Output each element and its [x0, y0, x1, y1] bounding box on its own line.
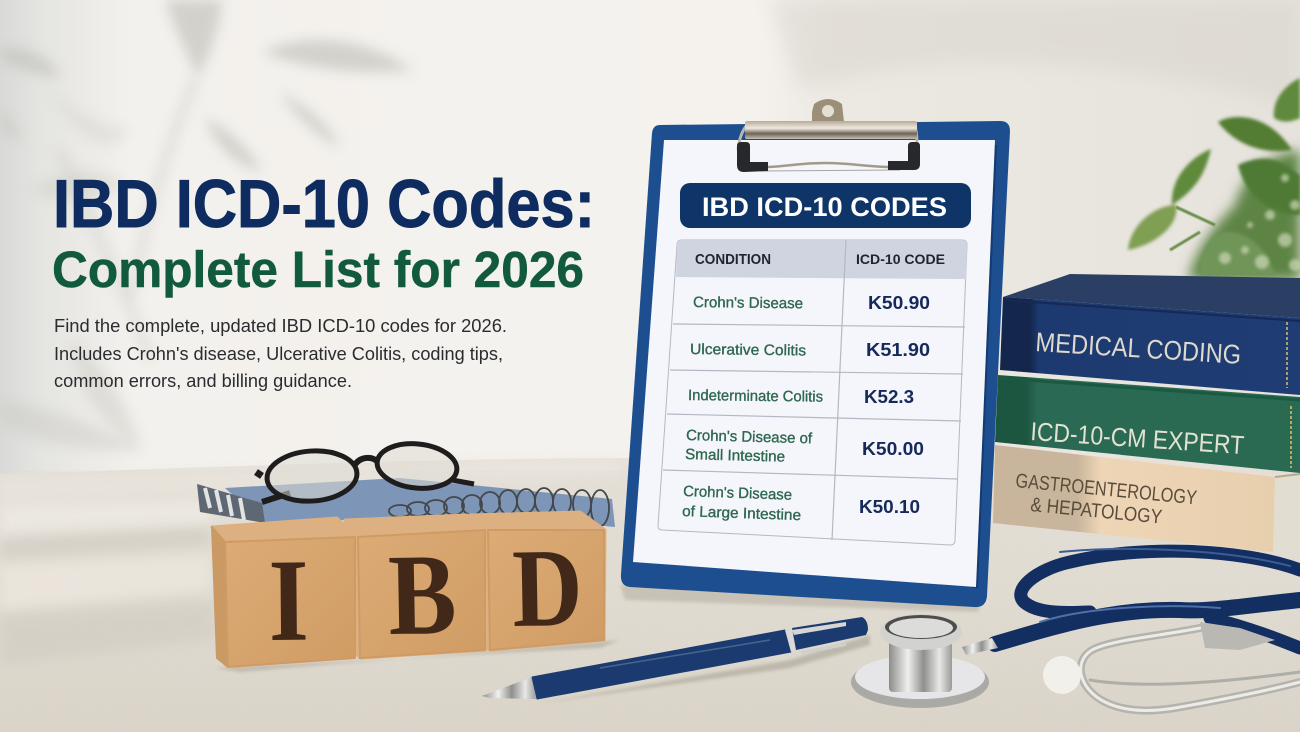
book: medical coding — [1000, 274, 1300, 395]
desk surface — [0, 458, 1300, 732]
shadow stems on wall — [60, 80, 195, 360]
right wall shading — [770, 0, 1300, 110]
table grid — [663, 240, 965, 540]
block I — [212, 518, 355, 667]
notebook — [197, 478, 615, 527]
clipboard board — [621, 121, 1010, 607]
row: Crohn's Disease — [693, 292, 930, 313]
block B: B — [387, 531, 457, 660]
row: Indeterminate Colitis: Indeterminate Colitis — [688, 387, 823, 406]
main title: Complete List for 2026 — [52, 241, 584, 298]
book: gastroenterology & hepatology — [993, 445, 1300, 552]
stack of books — [993, 274, 1300, 552]
description text: Includes Crohn's disease, Ulcerative Colitis, coding tips, — [54, 343, 503, 364]
clip — [737, 99, 920, 172]
leaf shadows on wall — [0, 0, 412, 451]
book: ICD-10-CM Expert: ICD-10-CM EXPERT — [1030, 416, 1245, 460]
heading pill: IBD ICD-10 CODES — [702, 192, 947, 222]
row: Crohn's Disease of Large Intestine: of Large Intestine — [682, 503, 801, 524]
book: gastroenterology & hepatology: GASTROENTEROLOGY — [1015, 470, 1198, 509]
main title — [52, 166, 595, 298]
row: Crohn's Disease of Large Intestine: K50.10 — [859, 496, 920, 517]
row: Ulcerative Colitis — [690, 339, 930, 360]
description text — [54, 315, 507, 391]
heading pill — [680, 183, 971, 228]
tubing — [995, 549, 1300, 648]
stethoscope — [851, 549, 1300, 710]
row: Crohn's Disease: K50.90 — [868, 292, 930, 313]
ear tip — [1043, 656, 1081, 694]
table header: ICD-10 CODE — [856, 252, 945, 267]
row: Crohn's Disease of Small Intestine — [685, 427, 924, 466]
block D: D — [511, 526, 583, 651]
codes table — [658, 240, 967, 545]
row: Ulcerative Colitis: K51.90 — [866, 339, 930, 360]
table header — [676, 240, 967, 279]
paper shadow — [972, 145, 997, 588]
block B — [345, 515, 485, 660]
row: Indeterminate Colitis — [688, 386, 914, 407]
block D — [470, 512, 605, 651]
plant — [1128, 78, 1300, 280]
row: Ulcerative Colitis: Ulcerative Colitis — [690, 341, 806, 359]
pen — [482, 617, 870, 704]
book: ICD-10-CM Expert — [995, 375, 1300, 473]
row: Crohn's Disease of Large Intestine — [682, 483, 920, 524]
book: gastroenterology & hepatology: & HEPATOLOGY — [1030, 494, 1163, 529]
background wall — [0, 0, 1300, 480]
book: medical coding: MEDICAL CODING — [1035, 327, 1242, 370]
row: Crohn's Disease of Large Intestine: Crohn's Disease — [683, 483, 792, 504]
table frame — [658, 240, 967, 545]
row: Crohn's Disease of Small Intestine: Small Intestine — [685, 446, 785, 466]
description text: Find the complete, updated IBD ICD-10 codes for 2026. — [54, 315, 507, 336]
row: Crohn's Disease of Small Intestine: Crohn's Disease of — [686, 427, 813, 447]
clipboard — [620, 99, 1010, 612]
chest piece — [851, 614, 998, 708]
row: Crohn's Disease: Crohn's Disease — [693, 294, 803, 312]
paper sheet — [633, 140, 995, 587]
block I: I — [268, 535, 309, 666]
description text: common errors, and billing guidance. — [54, 370, 352, 391]
wooden IBD blocks — [212, 512, 620, 672]
row: Indeterminate Colitis: K52.3 — [864, 386, 914, 407]
main title: IBD ICD-10 Codes: — [53, 166, 595, 242]
row: Crohn's Disease of Small Intestine: K50.00 — [862, 438, 924, 459]
glasses — [256, 440, 474, 504]
table header: CONDITION — [695, 252, 771, 268]
ear tubes — [1081, 628, 1300, 710]
